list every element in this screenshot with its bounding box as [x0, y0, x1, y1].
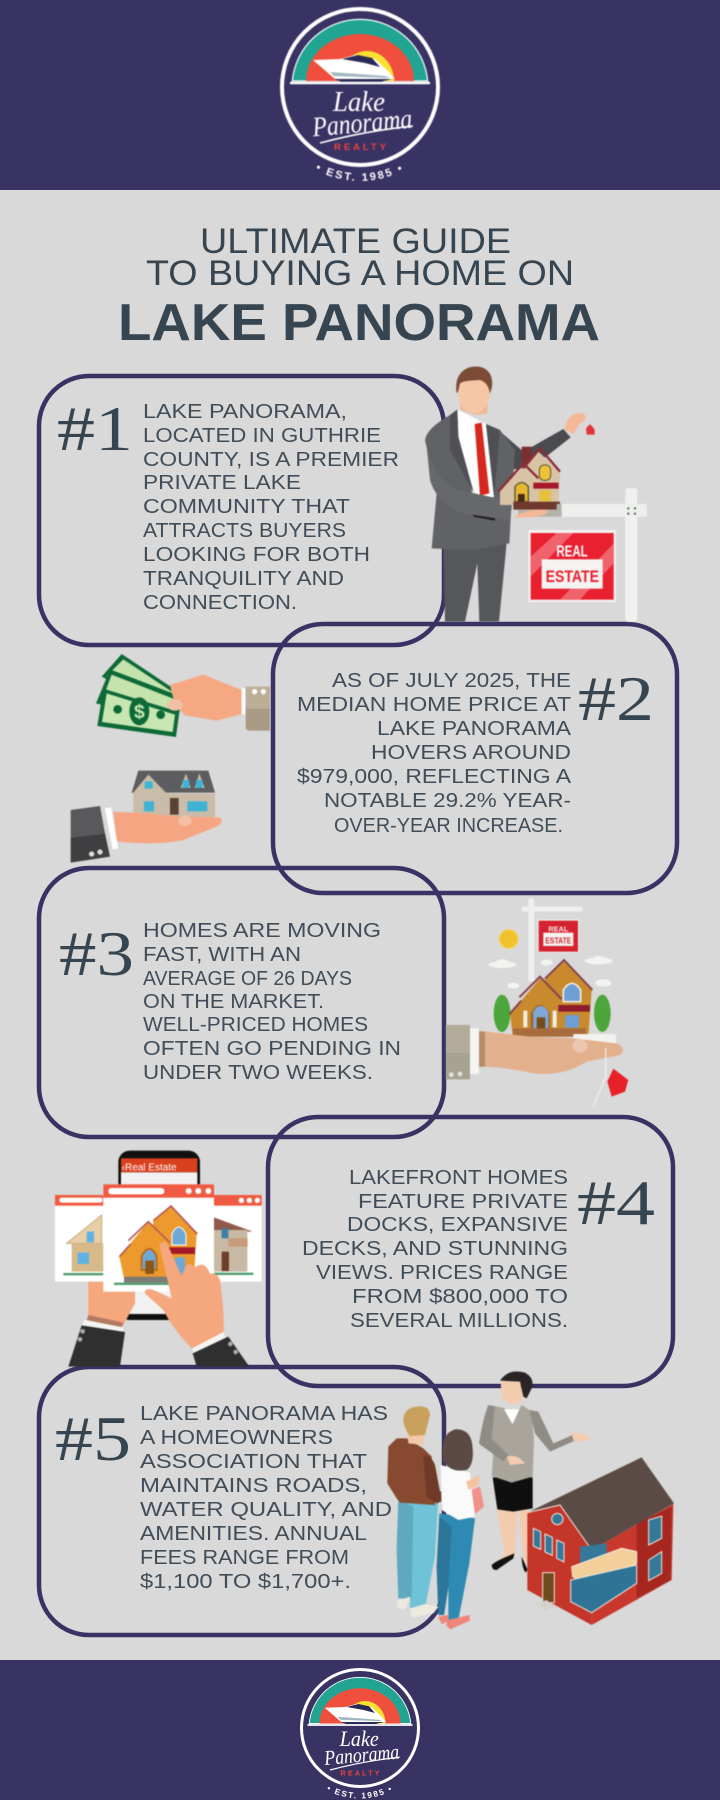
- lower hand: [515, 509, 548, 517]
- step 3 text: HOMES ARE MOVING: [143, 920, 381, 942]
- left listing card: [55, 1195, 103, 1282]
- illustration: agent showing house to couple: [387, 1372, 674, 1629]
- step 4 text: FEATURE PRIVATE: [358, 1191, 568, 1213]
- title: [118, 222, 600, 352]
- step 5 text: A HOMEOWNERS: [140, 1427, 333, 1449]
- step 2 text: [297, 670, 572, 837]
- left hand and sleeve: [68, 1282, 135, 1367]
- step 1 text: COMMUNITY THAT: [143, 496, 350, 518]
- house: [509, 960, 592, 1037]
- step 1 text: PRIVATE LAKE: [143, 472, 301, 494]
- step 5 text: $1,100 TO $1,700+.: [140, 1571, 351, 1593]
- sign: ESTATE: [545, 935, 572, 945]
- logo: Lake Panorama Realty: • EST. 1985 •: [316, 165, 402, 182]
- sun: [499, 929, 518, 949]
- trees: [494, 995, 611, 1032]
- sign post: [522, 898, 582, 982]
- step 4 text: [302, 1167, 568, 1332]
- step 5 text: ASSOCIATION THAT: [140, 1451, 367, 1473]
- man in couple: [387, 1406, 469, 1617]
- step 2 text: $979,000, REFLECTING A: [297, 766, 572, 788]
- title: ULTIMATE GUIDE: [200, 222, 511, 261]
- step 4 text: VIEWS. PRICES RANGE: [316, 1262, 568, 1284]
- step 3 text: WELL-PRICED HOMES: [143, 1014, 368, 1036]
- key with red house tag: [593, 1048, 628, 1107]
- panel: step 2 outline: [273, 624, 677, 893]
- step 1 text: LAKE PANORAMA,: [143, 401, 347, 423]
- step 1 text: CONNECTION.: [143, 592, 297, 614]
- phone: [118, 1151, 200, 1320]
- shirt: [457, 409, 494, 512]
- logo: Lake Panorama Realty: [279, 6, 441, 182]
- hand and sleeve: [446, 1025, 623, 1079]
- real estate sign: REAL: [556, 544, 588, 561]
- agent: [479, 1372, 592, 1573]
- step 4 text: DECKS, AND STUNNING: [302, 1238, 568, 1260]
- step 4 text: LAKEFRONT HOMES: [349, 1167, 568, 1189]
- raised arm and key: [497, 413, 595, 470]
- hand with house: [71, 806, 222, 863]
- step 5 number: #5: [55, 1404, 131, 1474]
- step 4 text: SEVERAL MILLIONS.: [350, 1310, 568, 1332]
- step 3 number: #3: [59, 919, 134, 989]
- step 1 text: LOCATED IN GUTHRIE: [143, 425, 381, 447]
- step 2 text: HOVERS AROUND: [371, 742, 571, 764]
- step 3 text: UNDER TWO WEEKS.: [143, 1062, 373, 1084]
- step 3 text: AVERAGE OF 26 DAYS: [143, 968, 352, 990]
- logo: footer Lake Panorama Realty: Panorama: [322, 1740, 400, 1770]
- trousers: [443, 540, 507, 622]
- logo: footer Lake Panorama Realty: [300, 1668, 420, 1798]
- hand with cash: [167, 675, 270, 731]
- step 1 text: LOOKING FOR BOTH: [143, 544, 370, 566]
- real estate sign: [528, 530, 616, 602]
- head: [456, 366, 492, 415]
- illustration: browsing listings on a phone: [55, 1151, 262, 1367]
- step 2 text: AS OF JULY 2025, THE: [332, 670, 571, 692]
- step 4 text: DOCKS, EXPANSIVE: [347, 1214, 568, 1236]
- step 3 text: FAST, WITH AN: [143, 944, 301, 966]
- illustration: hand holding house with sign: [446, 898, 628, 1107]
- woman in couple: [437, 1429, 484, 1629]
- panel: step 4 outline: [268, 1117, 673, 1386]
- footer band: [0, 1660, 720, 1800]
- step 1 text: ATTRACTS BUYERS: [143, 520, 346, 542]
- logo: Lake Panorama Realty: Lake: [332, 86, 385, 118]
- step 3 text: ON THE MARKET.: [143, 991, 324, 1013]
- logo: footer Lake Panorama Realty: Lake: [339, 1727, 379, 1751]
- real estate sign: ESTATE: [546, 567, 599, 586]
- step 4 number: #4: [577, 1168, 655, 1238]
- lower arm: [426, 440, 512, 521]
- clouds: [488, 956, 613, 989]
- step 2 text: OVER-YEAR INCREASE.: [334, 815, 563, 837]
- tie: [475, 423, 489, 496]
- step 2 number: #2: [578, 664, 654, 734]
- step 5 text: [140, 1403, 392, 1593]
- illustration: agent with house and sign: [425, 366, 647, 622]
- lapel: [450, 409, 500, 497]
- dollar bills: [96, 654, 187, 737]
- step 2 text: NOTABLE 29.2% YEAR-: [324, 790, 571, 812]
- panel: step 1 outline: [39, 376, 444, 645]
- centre listing card: [103, 1184, 214, 1292]
- step 1 number: #1: [57, 394, 133, 464]
- step 2 text: MEDIAN HOME PRICE AT: [297, 694, 571, 716]
- fence: [573, 1034, 616, 1044]
- panel: step 3 outline: [39, 868, 444, 1137]
- step 5 text: LAKE PANORAMA HAS: [140, 1403, 388, 1425]
- house: [527, 1457, 674, 1625]
- logo: Lake Panorama Realty: Panorama: [310, 104, 413, 143]
- dollar bills: $: [134, 702, 145, 723]
- step 5 text: WATER QUALITY, AND: [140, 1499, 392, 1521]
- step 3 text: OFTEN GO PENDING IN: [143, 1038, 401, 1060]
- step 1 text: [143, 401, 399, 614]
- right listing card: [213, 1195, 262, 1282]
- step 5 text: AMENITIES. ANNUAL: [140, 1523, 367, 1545]
- step 3 text: [143, 920, 401, 1084]
- step 1 text: TRANQUILITY AND: [143, 568, 344, 590]
- pointing hand and sleeve: [145, 1242, 249, 1367]
- belt: [473, 511, 495, 521]
- small house: [132, 771, 215, 817]
- sign: [538, 919, 579, 953]
- title: TO BUYING A HOME ON: [146, 254, 574, 293]
- phone: ‹Real Estate: [122, 1163, 177, 1174]
- jacket: [425, 410, 515, 550]
- logo: Lake Panorama Realty: REALTY: [334, 142, 387, 153]
- logo: footer Lake Panorama Realty: REALTY: [340, 1769, 380, 1777]
- step 1 text: COUNTY, IS A PREMIER: [143, 449, 399, 471]
- sign post: [560, 488, 647, 622]
- sign: REAL: [548, 925, 569, 934]
- panel: step 5 outline: [39, 1367, 444, 1635]
- header band: [0, 0, 720, 190]
- illustration: money and house exchange: [71, 654, 270, 863]
- step 5 text: MAINTAINS ROADS,: [140, 1475, 367, 1497]
- step 4 text: FROM $800,000 TO: [352, 1286, 568, 1308]
- step 5 text: FEES RANGE FROM: [140, 1547, 349, 1569]
- house model: [498, 447, 562, 517]
- step 2 text: LAKE PANORAMA: [377, 718, 572, 740]
- title: LAKE PANORAMA: [118, 294, 600, 352]
